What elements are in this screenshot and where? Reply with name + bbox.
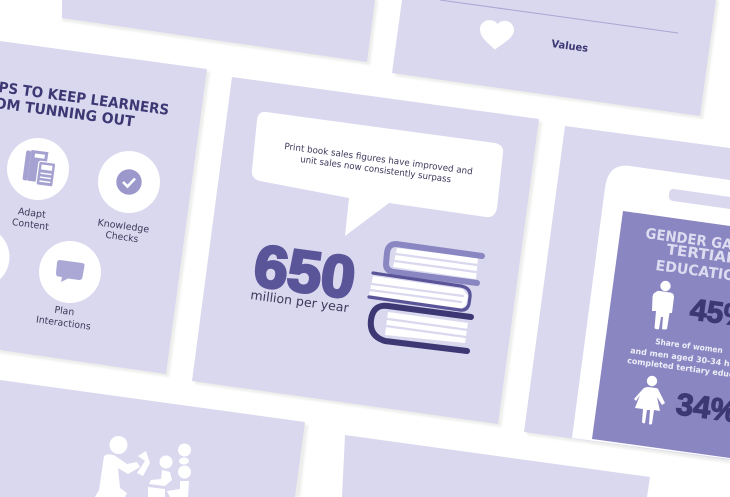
label: knowledge checks: Checks xyxy=(105,230,139,245)
partial circle xyxy=(0,226,10,288)
stat: 650: 650 xyxy=(250,232,359,311)
label: plan interactions: Plan xyxy=(54,305,75,318)
speech bubble xyxy=(252,112,503,236)
panel: top left card xyxy=(62,0,378,65)
panel: tips card xyxy=(0,41,210,377)
icon: heart xyxy=(480,20,514,50)
label: knowledge checks xyxy=(97,218,150,245)
icon: teacher and children xyxy=(95,436,191,497)
icon: man xyxy=(652,281,674,330)
phone screen xyxy=(592,211,730,458)
share text xyxy=(627,337,730,382)
bubble text: unit sales now consistently surpass xyxy=(300,155,452,185)
label: knowledge checks: Knowledge xyxy=(97,218,150,235)
label: plan interactions: Interactions xyxy=(35,314,91,333)
panel: bottom center card xyxy=(342,435,650,497)
panel: top right values card xyxy=(392,0,719,119)
icon circle: knowledge checks xyxy=(98,151,160,213)
panel: phone card xyxy=(524,126,730,463)
label: adapt content: Adapt xyxy=(17,206,47,221)
phone body xyxy=(572,166,730,459)
heading: gender gap xyxy=(644,226,730,286)
icon circle: adapt content xyxy=(7,138,69,200)
label: plan interactions xyxy=(35,305,91,333)
icon circle: plan interactions xyxy=(39,241,101,303)
stat label: million per year xyxy=(250,287,351,315)
bubble text: Print book sales figures have improved and xyxy=(284,142,473,177)
values label: Values xyxy=(551,38,589,55)
phone speaker xyxy=(669,189,730,209)
label: adapt content: Content xyxy=(11,217,50,233)
panel: bottom left card xyxy=(0,380,308,497)
share text: Share of women xyxy=(655,337,724,355)
icon: stack of books xyxy=(369,244,482,351)
panel: book sales card xyxy=(192,77,542,427)
label: adapt content xyxy=(11,206,50,233)
icon: woman xyxy=(634,376,665,424)
